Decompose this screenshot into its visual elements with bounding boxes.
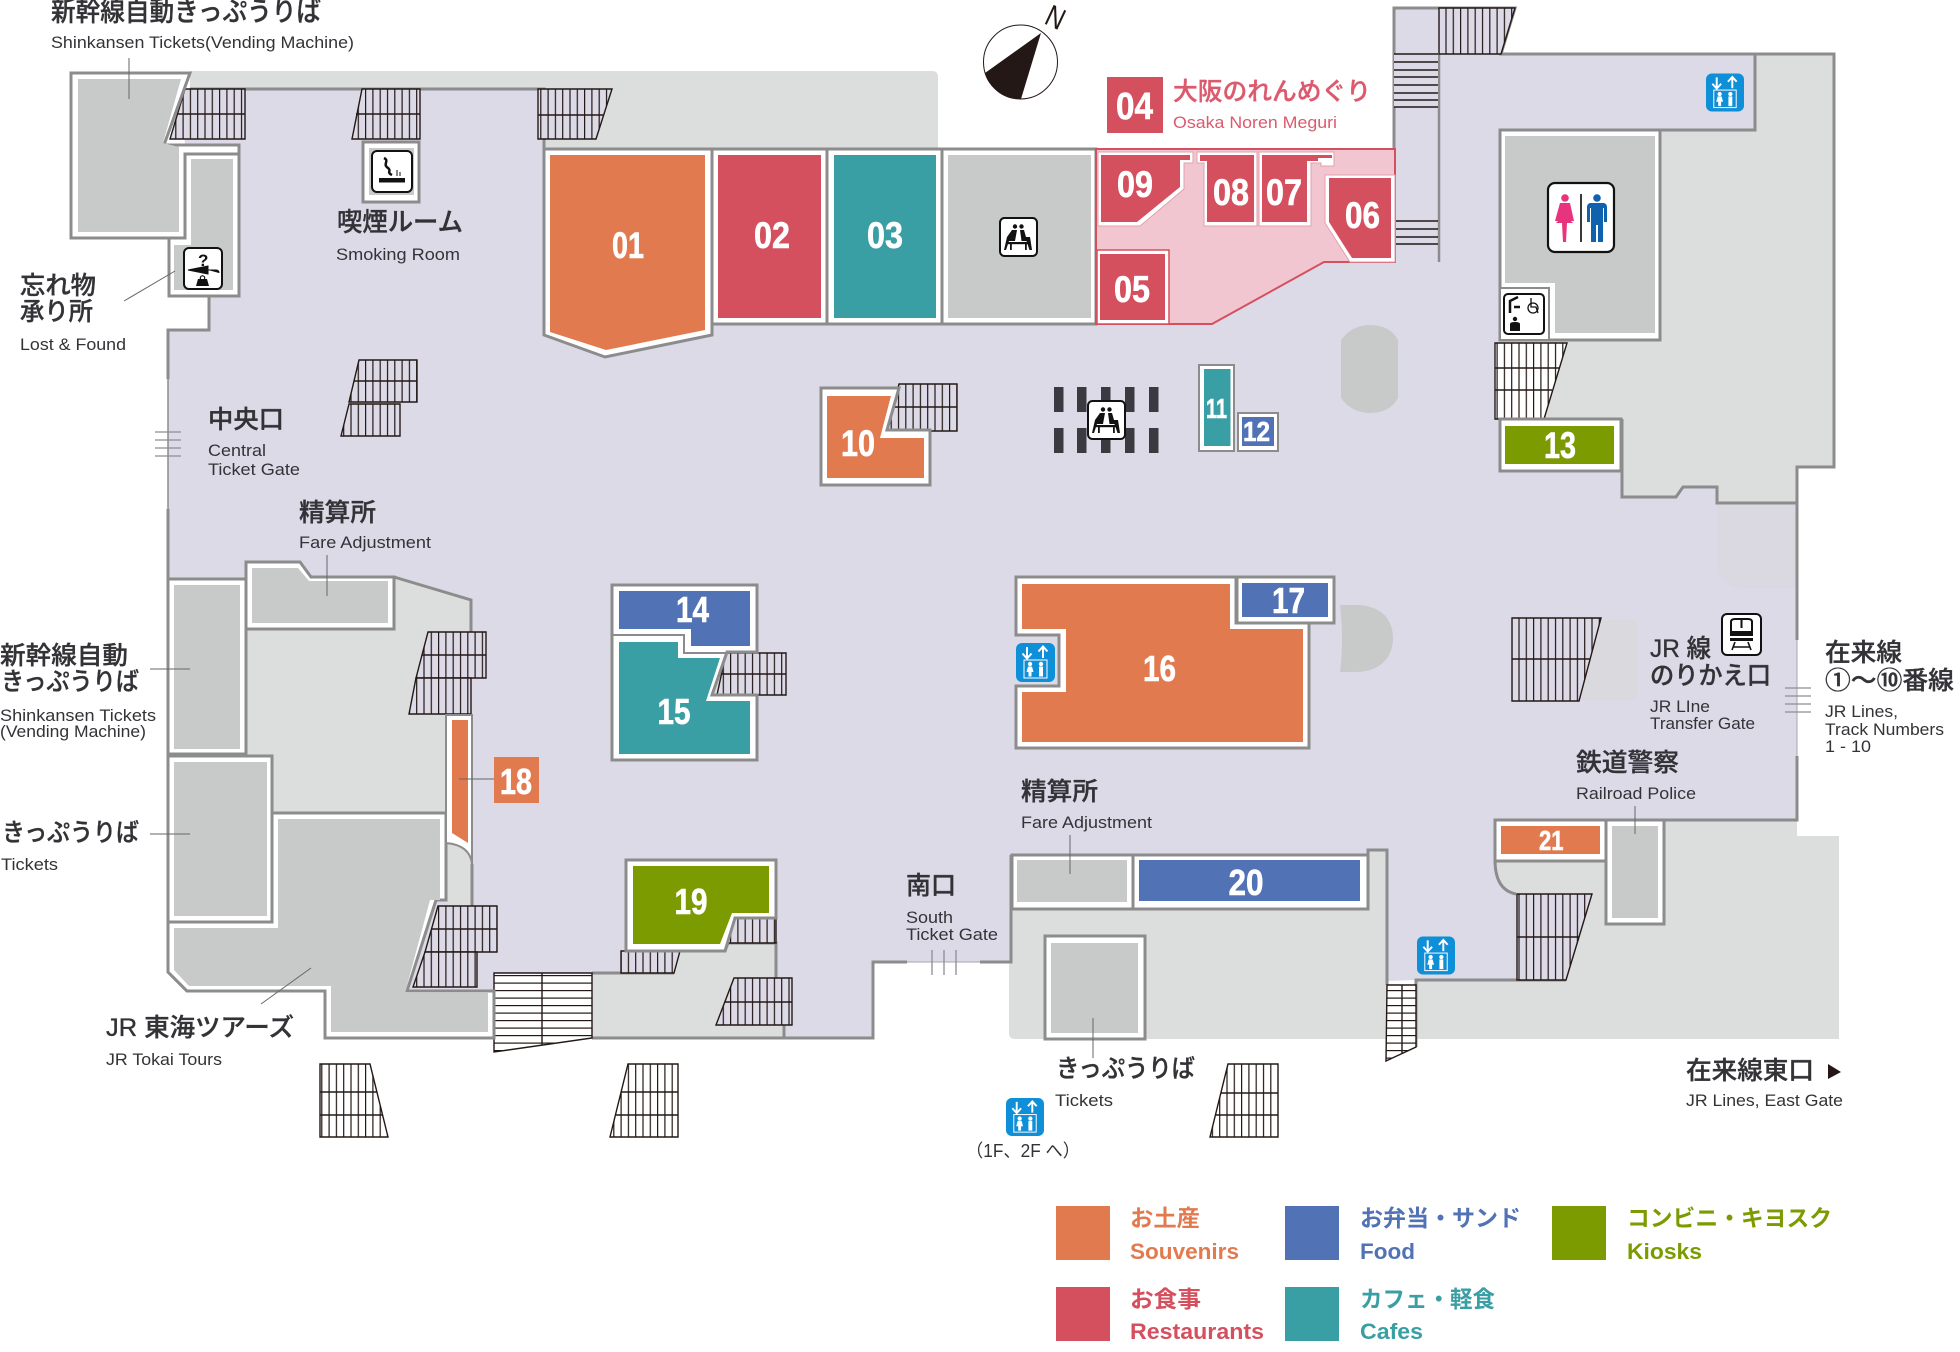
icon: elevator at shop 16: [1016, 643, 1055, 682]
label: railroad police: [1576, 749, 1696, 803]
room: fare adjustment west: [246, 562, 394, 629]
waiting room: [942, 149, 1096, 324]
shop 14: [619, 589, 750, 646]
label: JR Tokai Tours: JR 東海ツアーズ: [106, 1014, 294, 1042]
label: JR Tokai Tours: JR Tokai Tours: [106, 1050, 222, 1069]
shop 09: [1098, 152, 1193, 226]
shop 18: 18: [500, 761, 532, 802]
shop 12: [1238, 413, 1278, 451]
Osaka Noren Meguri zone: [1096, 149, 1395, 324]
label: JR lines tracks 1 to 10: 1 - 10: [1825, 737, 1871, 756]
legend: cafes: カフェ・軽食: [1360, 1286, 1495, 1312]
shop 01: [544, 149, 712, 357]
label: Shinkansen tickets west: (Vending Machine): [0, 722, 146, 741]
shop 07: 07: [1266, 172, 1302, 213]
icon: elevator east: [1417, 936, 1455, 974]
label: Shinkansen tickets north: Shinkansen Tickets(Vending Machine): [51, 33, 354, 52]
label: railroad police: Railroad Police: [1576, 784, 1696, 803]
icon: seating: [1088, 401, 1125, 439]
shop 14: 14: [676, 589, 709, 630]
legend: kiosks: [1552, 1205, 1832, 1264]
room: Shinkansen tickets vending machines north: [71, 73, 239, 238]
stairs: [170, 8, 1601, 1137]
label: smoking room: [336, 207, 463, 264]
label: central ticket gate: Central: [208, 441, 266, 460]
shop 13: [1500, 419, 1621, 471]
label: JR Tokai Tours: [106, 1014, 294, 1069]
label: JR lines east gate: JR Lines, East Gate: [1686, 1091, 1843, 1110]
legend: food: [1285, 1205, 1521, 1264]
legend: cafes: [1285, 1286, 1495, 1344]
shop 01: 01: [612, 225, 644, 266]
room: railroad police: [1606, 820, 1664, 924]
shop 20: 20: [1228, 862, 1264, 903]
label: Shinkansen tickets north: [51, 0, 354, 52]
label: lost and found: [20, 272, 126, 354]
label: JR lines tracks 1 to 10: 在来線: [1825, 639, 1902, 667]
shop 18: [446, 715, 539, 864]
label: smoking room: Smoking Room: [336, 245, 460, 264]
legend: souvenirs: Souvenirs: [1130, 1239, 1239, 1264]
arrow: east: [1828, 1064, 1841, 1079]
columns: [1340, 325, 1398, 672]
label: central ticket gate: 中央口: [208, 406, 284, 434]
shop 08: 08: [1213, 172, 1249, 213]
shop 05: 05: [1114, 269, 1150, 310]
shop 19: 19: [674, 881, 708, 922]
room: tickets west: [168, 756, 272, 922]
label: tickets south: Tickets: [1055, 1091, 1113, 1110]
shop 16: 16: [1143, 648, 1176, 689]
label: south ticket gate: 南口: [906, 872, 956, 900]
shop 07: [1259, 152, 1334, 226]
legend: cafes: Cafes: [1360, 1319, 1423, 1344]
legend: souvenirs: [1056, 1205, 1239, 1264]
label: JR lines tracks 1 to 10: Track Numbers: [1825, 720, 1944, 739]
icon: restrooms: [1548, 183, 1614, 252]
shop 02: [712, 149, 827, 324]
label: Shinkansen tickets west: [0, 642, 156, 741]
label: JR line transfer gate: [1650, 635, 1771, 733]
legend: kiosks: Kiosks: [1627, 1239, 1702, 1264]
shop 17: 17: [1272, 580, 1305, 621]
label: JR line transfer gate: JR 線: [1650, 635, 1711, 663]
room: fare adjustment south: [1012, 855, 1133, 909]
shops 14 and 15: [612, 585, 757, 760]
room: smoking room: [363, 142, 419, 202]
shop 03: 03: [867, 215, 903, 256]
shop 11: 11: [1206, 393, 1227, 424]
shop 15: 15: [658, 691, 690, 732]
label: south ticket gate: South: [906, 908, 953, 927]
icon: train: [1722, 614, 1761, 655]
shop 12: 12: [1243, 416, 1270, 447]
icon: lost and found: ?: [198, 251, 208, 270]
legend: restaurants: お食事: [1130, 1286, 1201, 1312]
label: tickets west: [1, 819, 139, 874]
shop 09: 09: [1117, 164, 1153, 205]
label: tickets south: [1055, 1055, 1195, 1110]
label: JR line transfer gate: のりかえ口: [1650, 662, 1771, 690]
label: lost and found: 忘れ物: [20, 272, 96, 300]
label: south ticket gate: Ticket Gate: [906, 925, 998, 944]
gate marks: [155, 432, 1811, 975]
room: lost and found: [169, 154, 239, 296]
icon: elevator south to 1F 2F: [1006, 1098, 1044, 1136]
shop 13: 13: [1544, 425, 1576, 466]
shop 17: [1237, 577, 1334, 623]
callout: shop 04 Osaka Noren Meguri: 大阪のれんめぐり: [1173, 78, 1371, 106]
shop 11: [1199, 365, 1234, 451]
shop 21: 21: [1539, 825, 1564, 856]
label: fare adjustment south: 精算所: [1021, 778, 1098, 806]
legend: kiosks: コンビニ・キヨスク: [1627, 1205, 1832, 1231]
callout: shop 04 Osaka Noren Meguri: [1107, 77, 1371, 133]
label: fare adjustment west: Fare Adjustment: [299, 533, 431, 552]
label: JR lines tracks 1 to 10: JR Lines,: [1825, 702, 1898, 721]
room: JR Tokai Tours: [168, 813, 494, 1038]
icon: elevator northeast: [1706, 74, 1744, 112]
label: smoking room: 喫煙ルーム: [337, 207, 463, 237]
label: central ticket gate: Ticket Gate: [208, 460, 300, 479]
legend: [1056, 1205, 1832, 1344]
connector lines: [124, 58, 1635, 1058]
label: central ticket gate: [208, 406, 300, 479]
restroom block: [1500, 130, 1660, 340]
shop 10: [821, 388, 930, 485]
label: JR line transfer gate: JR LIne: [1650, 697, 1710, 716]
shop 19: [626, 860, 776, 951]
legend: souvenirs: お土産: [1130, 1205, 1200, 1231]
label: JR lines tracks 1 to 10: [1825, 639, 1954, 756]
compass: [984, 0, 1071, 99]
legend: food: お弁当・サンド: [1360, 1205, 1521, 1231]
label: fare adjustment west: 精算所: [299, 499, 376, 527]
label: Shinkansen tickets west: 新幹線自動: [0, 642, 128, 670]
label: tickets south: きっぷうりば: [1056, 1055, 1195, 1083]
label: tickets west: Tickets: [1, 855, 58, 874]
icon: smoking: [372, 151, 412, 192]
shop 03: [827, 149, 942, 324]
legend: restaurants: Restaurants: [1130, 1319, 1264, 1344]
label: lost and found: 承り所: [20, 298, 93, 326]
label: fare adjustment west: [299, 499, 431, 552]
icon: seating: [1000, 218, 1037, 256]
shop 20: [1133, 855, 1368, 909]
legend: food: Food: [1360, 1239, 1415, 1264]
label: JR lines tracks 1 to 10: ①～⑩番線: [1825, 667, 1954, 695]
room: accessible restroom: [1500, 288, 1549, 340]
callout: shop 04 Osaka Noren Meguri: Osaka Noren Meguri: [1173, 113, 1337, 132]
shop 10: 10: [841, 423, 875, 464]
concourse floor: [168, 8, 1797, 1038]
back-of-house areas: [190, 54, 1839, 1039]
room: Shinkansen vending machines south: [168, 579, 246, 754]
label: JR lines east gate: 在来線東口: [1686, 1057, 1814, 1085]
label: Shinkansen tickets west: きっぷうりば: [1, 668, 139, 696]
label: tickets west: きっぷうりば: [2, 819, 139, 847]
shop 06: 06: [1345, 195, 1380, 236]
shop 08: [1197, 152, 1257, 226]
shop 15: [619, 642, 750, 754]
structural walls: [168, 8, 1834, 1047]
label: lost and found: Lost & Found: [20, 335, 126, 354]
label: JR line transfer gate: Transfer Gate: [1650, 714, 1755, 733]
label: fare adjustment south: [1021, 778, 1152, 832]
label: Shinkansen tickets west: Shinkansen Tickets: [0, 706, 156, 725]
label: railroad police: 鉄道警察: [1576, 749, 1679, 777]
shop 06: [1325, 175, 1395, 262]
shop 16: [1016, 577, 1309, 748]
shop 05: [1097, 250, 1169, 324]
room: tickets south: [1045, 936, 1145, 1039]
label: to 1F and 2F: （1F、2F へ）: [966, 1141, 1080, 1161]
icon: lost and found: [184, 248, 222, 289]
label: fare adjustment south: Fare Adjustment: [1021, 813, 1152, 832]
label: JR lines east gate: [1686, 1057, 1843, 1110]
label: south ticket gate: [906, 872, 998, 944]
shop 21: [1495, 820, 1606, 861]
legend: restaurants: [1056, 1286, 1264, 1344]
seating area: [1054, 387, 1158, 453]
callout: shop 04 Osaka Noren Meguri: 04: [1116, 86, 1153, 128]
shop 02: 02: [754, 215, 790, 256]
